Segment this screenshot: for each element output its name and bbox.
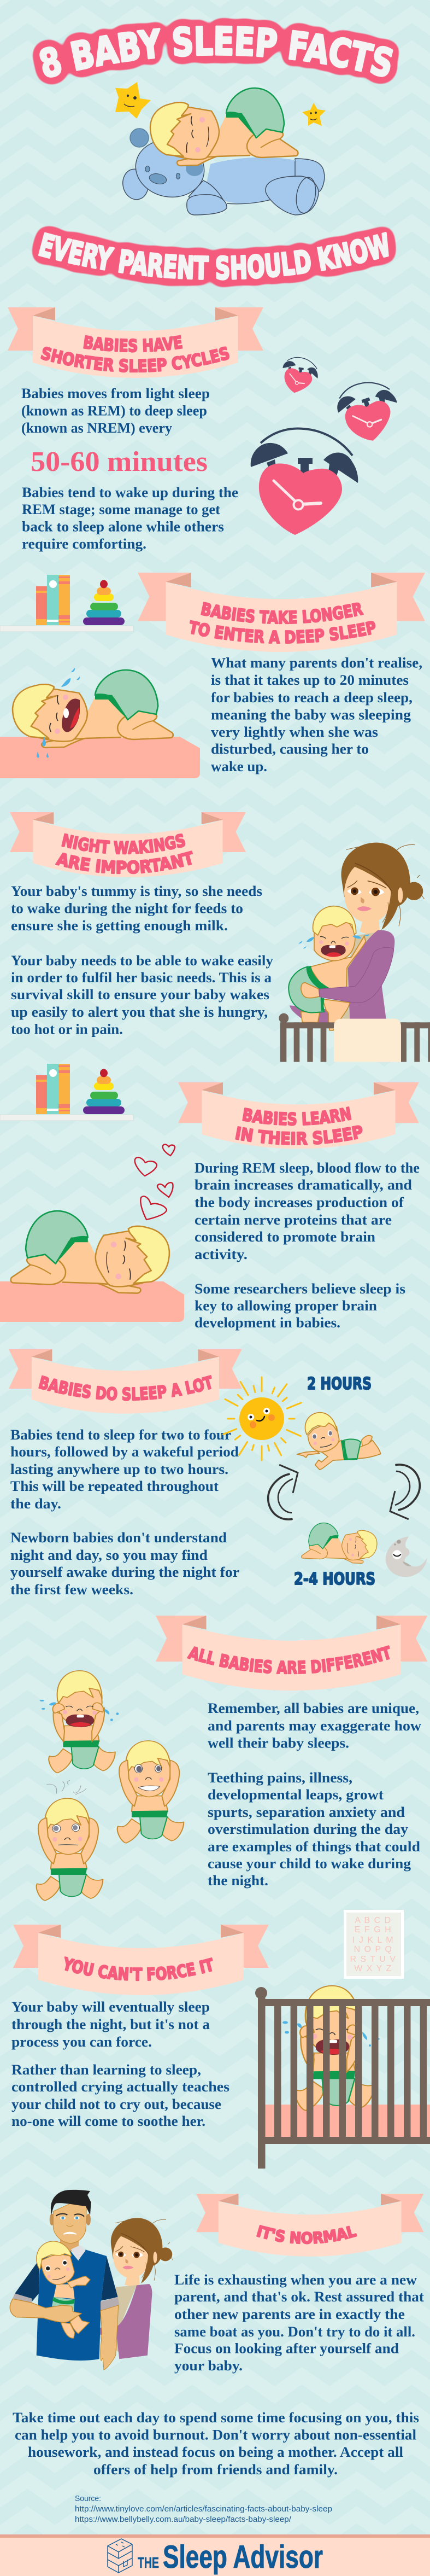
text block: life is exhausting: Focus on looking after yourself and [174, 2341, 399, 2356]
father figure [13, 2190, 119, 2370]
icon: smiling sun [223, 1377, 301, 1460]
text block: brain development: key to allowing proper brain [195, 1298, 378, 1314]
text block: waking during REM: Babies tend to wake up during the [22, 485, 238, 500]
arrow: cycle right going down [390, 1465, 420, 1519]
banner: night wakings: ARE IMPORTANT [55, 850, 193, 874]
illustration: awake crawling baby [297, 1413, 381, 1470]
text block: REM and brain: certain nerve proteins that are [195, 1212, 392, 1228]
poster: alphabet chart: N O P Q [354, 1945, 392, 1954]
poster: alphabet chart: W X Y Z [354, 1964, 392, 1973]
text block: survival skill: survival skill to ensure your baby wakes [11, 987, 269, 1003]
text block: newborn night and day [10, 1530, 239, 1598]
text block: causes of waking: are examples of things that could [208, 1839, 421, 1855]
banner: babies do sleep a lot: BABIES DO SLEEP A LOT [38, 1375, 212, 1401]
illustration: crying baby on pink mat [0, 668, 200, 778]
label: 2 hours: 2 HOURS [307, 1374, 372, 1394]
banner: babies do sleep a lot [9, 1349, 242, 1414]
text block: sleep pattern: the day. [10, 1496, 61, 1512]
text block: take time out: offers of help from friends and family. [93, 2462, 338, 2478]
text block: cannot force: through the night, but it's not a [11, 2016, 210, 2032]
text block: take time out: Take time out each day to spend some time focusing on you, this [13, 2410, 419, 2426]
banner: all babies are different [156, 1616, 427, 1691]
text block: deep sleep timing: wake up. [211, 759, 267, 774]
text block: deep sleep timing: is that it takes up to 20 minutes [211, 672, 409, 688]
text block: controlled crying: your child not to cry out, because [11, 2096, 221, 2112]
text block: cannot force [11, 1999, 210, 2050]
text block: all babies unique: and parents may exaggerate how [208, 1718, 421, 1734]
icon: large smiling star [115, 82, 151, 119]
sources: https://www.bellybelly.com.au/baby-sleep/facts-baby-sleep/ [75, 2515, 292, 2524]
banner: you can't force it: YOU CAN'T FORCE IT [64, 1956, 213, 1981]
illustration: grimacing baby sitting [117, 1741, 184, 1843]
illustration: crying baby in crib [255, 1986, 430, 2169]
text block: take time out [13, 2410, 419, 2478]
text block: REM and brain [195, 1160, 420, 1262]
banner: babies have shorter sleep cycles: BABIES HAVE [83, 335, 182, 353]
baby held by father [10, 2241, 90, 2338]
panel: all babies are different [36, 1616, 427, 1901]
text block: controlled crying [11, 2062, 229, 2129]
text block: REM and brain: the body increases production of [195, 1194, 404, 1210]
title: 8 Baby Sleep Facts: 8 BABY SLEEP FACTS [32, 18, 399, 85]
text block: waking during REM: back to sleep alone while others [22, 518, 224, 535]
text block: sleep pattern: This will be repeated throughout [10, 1478, 219, 1494]
icon: floating red hearts [135, 1145, 175, 1220]
text block: tiny tummy: ensure she is getting enough milk. [11, 918, 228, 934]
icon: medium heart alarm clock [332, 374, 406, 448]
icon: small heart alarm clock [280, 355, 320, 395]
illustration: sleeping baby on pink mat [0, 1211, 184, 1322]
text block: life is exhausting: same boat as you. Don't try to do it all. [174, 2324, 415, 2340]
text block: life is exhausting: your baby. [174, 2358, 243, 2374]
text block: causes of waking: overstimulation during the day [208, 1821, 408, 1837]
text block: REM and brain: During REM sleep, blood flow to the [195, 1160, 420, 1176]
banner: babies have shorter sleep cycles: SHORTER SLEEP CYCLES [40, 347, 229, 373]
banner: night wakings [10, 812, 246, 877]
text block: controlled crying: no-one will come to soothe her. [11, 2113, 205, 2129]
illustration: tired mother holding crying baby over crib [279, 843, 430, 1062]
panel: babies do sleep a lot [9, 1349, 427, 1598]
label: 2-4 hours: 2-4 HOURS [294, 1570, 375, 1589]
text block: take time out: can help you to avoid burnout. Don't worry about non-essential [15, 2427, 416, 2443]
panel: it's normal [10, 2190, 424, 2374]
banner: it's normal [196, 2194, 424, 2257]
text block: all babies unique: Remember, all babies are unique, [208, 1700, 419, 1716]
text block: causes of waking [208, 1770, 421, 1889]
text block: life is exhausting: Life is exhausting when you are a new [174, 2272, 417, 2288]
text block: deep sleep timing: disturbed, causing her to [211, 741, 369, 757]
panel: babies learn in their sleep [0, 1082, 420, 1331]
text block: REM and brain: brain increases dramatically, and [195, 1177, 413, 1193]
banner: babies have shorter sleep cycles [8, 307, 263, 378]
banner: babies learn: BABIES LEARN [242, 1106, 352, 1126]
text block: causes of waking: spurts, separation anxiety and [208, 1804, 405, 1820]
sources: http://www.tinylove.com/en/articles/fascinating-facts-about-baby-sleep [75, 2504, 332, 2514]
subtitle: Every Parent Should Know: EVERY PARENT SHOULD KNOW [32, 225, 397, 288]
banner: babies take longer: TO ENTER A DEEP SLEEP [189, 620, 376, 644]
banner: you can't force it [13, 1925, 269, 1995]
text block: tiny tummy: Your baby's tummy is tiny, so she needs [11, 883, 262, 899]
text block: cannot force: process you can force. [11, 2034, 152, 2050]
banner: babies take longer: BABIES TAKE LONGER [201, 602, 364, 625]
banner: night wakings: NIGHT WAKINGS [61, 834, 186, 854]
text block: newborn night and day: yourself awake during the night for [10, 1564, 239, 1580]
illustration: small sleeping baby [302, 1523, 377, 1563]
text block: sleep cycle intro: (known as REM) to deep sleep [21, 403, 207, 419]
text block: deep sleep timing: for babies to reach a deep sleep, [211, 690, 413, 706]
icon: headache squiggles [46, 1780, 86, 1795]
footer band with logo [0, 2534, 430, 2576]
logo wordmark [138, 2539, 323, 2575]
arrow: cycle left going up [268, 1465, 298, 1519]
text block: survival skill: too hot or in pain. [11, 1022, 123, 1038]
text block: sleep cycle intro: Babies moves from light sleep [21, 386, 210, 401]
banner: babies take longer [138, 573, 425, 652]
text block: survival skill: in order to fulfil her basic needs. This is a [11, 970, 272, 986]
second shelf with books and stacking toy [0, 1064, 133, 1121]
logo wordmark: Sleep Advisor [163, 2539, 323, 2575]
text block: causes of waking: developmental leaps, growt [208, 1787, 384, 1803]
text block: survival skill: up easily to alert you that she is hungry, [11, 1004, 268, 1020]
sources: Source: [75, 2494, 101, 2503]
text block: waking during REM [22, 485, 238, 552]
text block: deep sleep timing: What many parents don't realise, [211, 655, 422, 671]
text block: newborn night and day: Newborn babies don't understand [10, 1530, 227, 1546]
text block: causes of waking: the night. [208, 1873, 268, 1889]
icon: sleeping moon [386, 1536, 427, 1577]
mother figure [99, 2218, 173, 2359]
text block: cannot force: Your baby will eventually sleep [11, 1999, 210, 2015]
text block: all babies unique: well their baby sleeps. [208, 1735, 349, 1751]
poster: alphabet chart: I J K L M [352, 1936, 394, 1945]
banner: babies learn [178, 1082, 419, 1149]
poster: alphabet chart: A B C D [355, 1916, 392, 1925]
text block: brain development: Some researchers believe sleep is [195, 1281, 405, 1297]
panel: babies take longer to enter a deep sleep [0, 573, 425, 778]
illustration: baby sleeping on blue teddy bear [120, 88, 325, 215]
panel: you can't force it [11, 1910, 430, 2169]
text block: deep sleep timing: very lightly when she was [211, 724, 378, 740]
text block: sleep cycle intro: (known as NREM) every [21, 420, 172, 436]
text block: waking during REM: require comforting. [22, 536, 146, 552]
text block: life is exhausting [174, 2272, 424, 2374]
text block: causes of waking: Teething pains, illness, [208, 1770, 352, 1786]
illustration: crying baby sitting [40, 1671, 119, 1773]
callout: 50-60 minutes: 50-60 minutes [31, 446, 208, 477]
text block: tiny tummy [11, 883, 262, 934]
illustration: tired parents holding baby [10, 2190, 173, 2370]
banner: babies learn: IN THEIR SLEEP [235, 1125, 363, 1145]
icon: large heart alarm clock [251, 428, 358, 535]
text block: survival skill [11, 953, 273, 1038]
text block: sleep cycle intro [21, 386, 210, 436]
icon: mattress stack logo [108, 2539, 132, 2573]
text block: sleep pattern: lasting anywhere up to two hours. [10, 1461, 228, 1477]
logo wordmark: THE [138, 2554, 159, 2571]
shelf with books and stacking toy [0, 575, 133, 632]
banner: it's normal: IT'S NORMAL [256, 2225, 357, 2245]
poster: alphabet chart: E F G H [355, 1925, 392, 1934]
text block: tiny tummy: to wake during the night for feeds to [11, 900, 243, 917]
poster: alphabet chart [344, 1910, 404, 1979]
text block: survival skill: Your baby needs to be able to wake easily [11, 953, 273, 969]
text block: brain development: development in babies. [195, 1315, 340, 1331]
icon: small smiling star [302, 103, 326, 126]
text block: deep sleep timing: meaning the baby was sleeping [211, 707, 411, 723]
panel: night wakings are important [10, 812, 430, 1062]
text block: newborn night and day: night and day, so you may find [10, 1547, 208, 1563]
text block: deep sleep timing [211, 655, 422, 774]
text block: take time out: housework, and instead focus on being a mother. Accept all [28, 2444, 403, 2460]
text block: controlled crying: Rather than learning to sleep, [11, 2062, 201, 2078]
illustration: worried baby sitting [37, 1780, 103, 1901]
banner: all babies are different: ALL BABIES ARE DIFFERENT [187, 1645, 390, 1675]
text block: REM and brain: activity. [195, 1246, 248, 1262]
text block: causes of waking: cause your child to wake during [208, 1856, 411, 1872]
sources [75, 2494, 332, 2524]
text block: newborn night and day: the first few weeks. [10, 1582, 133, 1598]
text block: brain development [195, 1281, 405, 1331]
text block: waking during REM: REM stage; some manage to get [22, 502, 220, 517]
text block: sleep pattern: Babies tend to sleep for two to four [10, 1427, 231, 1443]
text block: all babies unique [208, 1700, 421, 1751]
text block: sleep pattern [10, 1427, 239, 1512]
text block: life is exhausting: parent, and that's ok. Rest assured that [174, 2289, 424, 2305]
text block: life is exhausting: other new parents are in exactly the [174, 2306, 405, 2322]
text block: sleep pattern: hours, followed by a wakeful period [10, 1444, 239, 1460]
poster: alphabet chart: R S T U V [350, 1955, 396, 1964]
text block: controlled crying: controlled crying actually teaches [11, 2079, 229, 2095]
panel: babies have shorter sleep cycles [8, 307, 397, 552]
text block: REM and brain: considered to promote brain [195, 1229, 376, 1245]
